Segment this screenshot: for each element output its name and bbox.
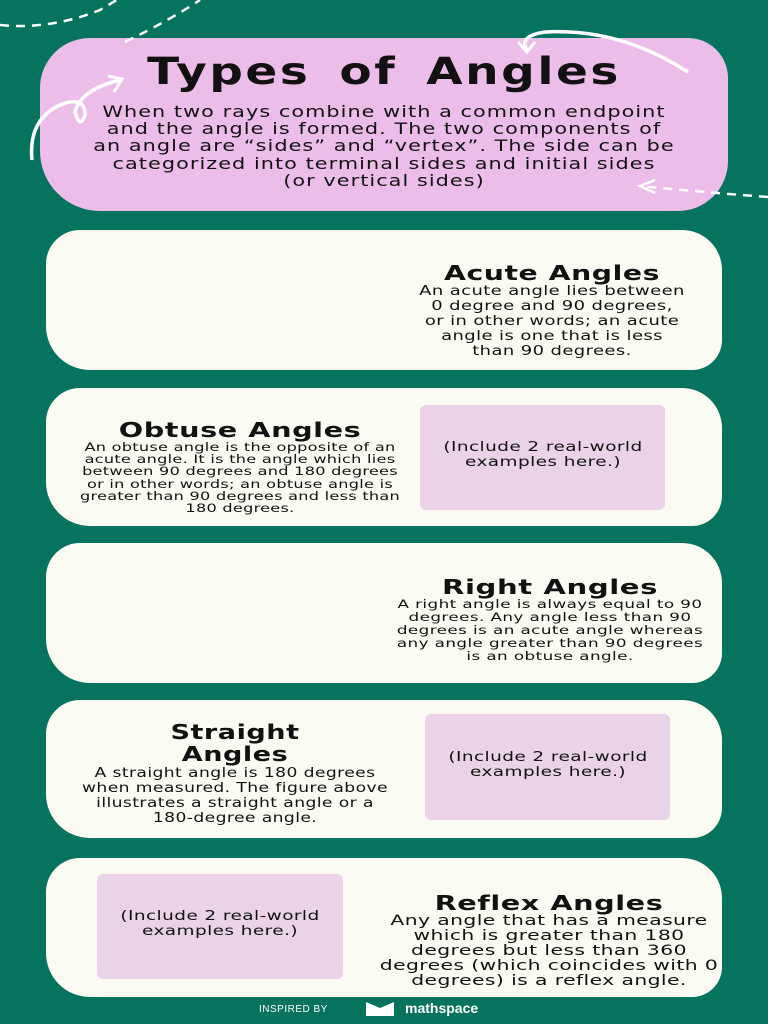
obtuse text: or in other words; an obtuse angle is	[87, 477, 393, 491]
acute text: 0 degree and 90 degrees,	[431, 299, 673, 314]
placeholder box: (Include 2 real-world	[120, 909, 320, 924]
acute text: An acute angle lies between	[419, 284, 685, 299]
acute text: or in other words; an acute	[425, 314, 679, 329]
straight text: when measured. The figure above	[82, 781, 388, 796]
placeholder box: examples here.)	[142, 924, 298, 939]
reflex text: degrees but less than 360	[411, 943, 687, 959]
intro text	[93, 102, 675, 190]
right text: is an obtuse angle.	[466, 649, 634, 663]
icon: mathspace logo	[366, 1002, 394, 1016]
right text: degrees is an acute angle whereas	[397, 623, 703, 637]
obtuse text: Obtuse Angles	[119, 418, 361, 442]
straight text: Angles	[182, 742, 288, 766]
reflex text: degrees) is a reflex angle.	[411, 973, 687, 989]
obtuse text: An obtuse angle is the opposite of an	[84, 440, 396, 454]
panel: acute	[46, 230, 722, 370]
reflex text	[380, 891, 718, 989]
panel: reflex	[46, 858, 722, 997]
straight text: Straight	[170, 720, 300, 744]
intro text: categorized into terminal sides and initial sides	[113, 154, 655, 173]
right text	[397, 575, 703, 663]
panel: obtuse	[46, 388, 722, 526]
straight text: illustrates a straight angle or a	[96, 796, 374, 811]
reflex text: Any angle that has a measure	[390, 913, 708, 929]
placeholder box	[425, 714, 670, 820]
intro text: (or vertical sides)	[283, 171, 485, 190]
footer: INSPIRED BY	[259, 1004, 328, 1015]
obtuse text: acute angle. It is the angle which lies	[85, 452, 395, 466]
right text: any angle greater than 90 degrees	[397, 636, 703, 650]
placeholder box: examples here.)	[470, 765, 626, 780]
intro text: an angle are “sides” and “vertex”. The side can be	[93, 136, 675, 155]
acute text	[419, 261, 685, 359]
header panel	[40, 38, 728, 211]
panel: straight	[46, 700, 722, 838]
obtuse text: between 90 degrees and 180 degrees	[82, 464, 398, 478]
footer: mathspace	[405, 1000, 478, 1016]
acute text: Acute Angles	[444, 261, 660, 285]
intro text: When two rays combine with a common endpoint	[102, 102, 666, 121]
footer	[259, 1000, 478, 1016]
panel: right	[46, 543, 722, 683]
obtuse text: greater than 90 degrees and less than	[80, 489, 400, 503]
straight text: 180-degree angle.	[153, 811, 317, 826]
placeholder box	[420, 405, 665, 510]
placeholder box	[97, 874, 343, 979]
intro text: and the angle is formed. The two components of	[107, 119, 661, 138]
reflex text: degrees (which coincides with 0	[380, 958, 718, 974]
straight text: A straight angle is 180 degrees	[95, 766, 375, 781]
reflex text: Reflex Angles	[435, 891, 663, 915]
placeholder box: examples here.)	[465, 455, 621, 470]
reflex text: which is greater than 180	[413, 928, 685, 944]
title: Types of Angles	[147, 50, 621, 93]
placeholder box: (Include 2 real-world	[448, 750, 648, 765]
right text: degrees. Any angle less than 90	[409, 610, 691, 624]
straight text	[82, 720, 388, 826]
acute text: angle is one that is less	[441, 329, 663, 344]
right text: A right angle is always equal to 90	[397, 597, 702, 611]
acute text: than 90 degrees.	[472, 344, 632, 359]
placeholder box: (Include 2 real-world	[443, 440, 643, 455]
obtuse text	[80, 418, 400, 515]
obtuse text: 180 degrees.	[185, 501, 295, 515]
right text: Right Angles	[442, 575, 658, 599]
